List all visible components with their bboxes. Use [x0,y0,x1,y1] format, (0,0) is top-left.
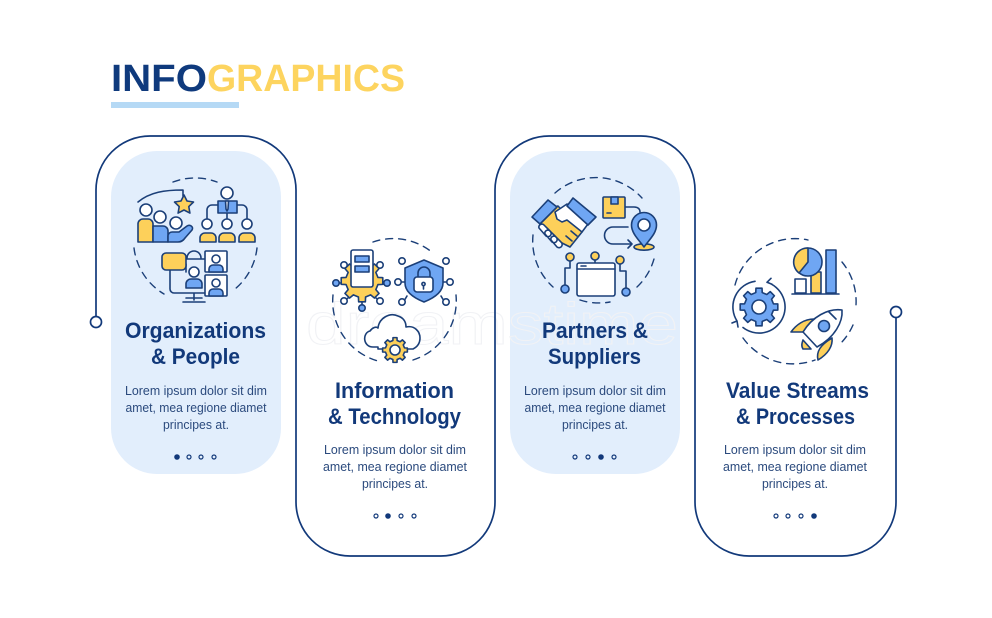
body text [323,443,468,491]
panel background: partners [510,151,680,474]
heading: & Processes [736,404,855,429]
body text [723,443,868,491]
pagination dots [573,455,616,459]
heading [328,378,462,429]
title: GRAPHICS [207,58,405,100]
body text: amet, mea regione diamet [126,401,267,415]
pagination dots [774,514,816,518]
title underline [111,102,239,108]
body text: Lorem ipsum dolor sit dim [324,443,466,457]
panel: value streams and processes [723,239,869,518]
body text: amet, mea regione diamet [524,401,666,415]
heading: Value Streams [726,378,869,403]
heading: Partners & [542,318,648,343]
pagination dots [175,455,216,459]
watermark: dreamstime [306,292,678,357]
heading: & People [151,344,240,369]
heading [726,378,869,429]
body text [524,384,666,432]
icon: information and technology [333,239,456,362]
heading: Organizations [125,318,266,343]
panel: information and technology [323,239,468,518]
heading: Information [335,378,454,403]
body text [125,384,267,432]
icon: partners and suppliers [532,178,656,303]
title: INFO [111,58,207,100]
body text: principes at. [163,418,229,432]
body text: principes at. [562,418,628,432]
body text: Lorem ipsum dolor sit dim [524,384,666,398]
heading [542,318,648,369]
panel: partners and suppliers [524,178,666,459]
body text: amet, mea regione diamet [323,460,468,474]
body text: amet, mea regione diamet [723,460,868,474]
body text: Lorem ipsum dolor sit dim [724,443,866,457]
icon: value streams and processes [732,239,856,364]
panel background: organizations [111,151,281,474]
body text: principes at. [362,477,428,491]
heading: & Technology [328,404,462,429]
body text: principes at. [762,477,828,491]
title [111,58,405,100]
panel: organizations and people [125,178,267,459]
pagination dots [374,514,416,518]
body text: Lorem ipsum dolor sit dim [125,384,267,398]
icon: organizations and people [134,178,257,302]
heading [125,318,266,369]
connecting outline [90,136,902,556]
heading: Suppliers [548,344,641,369]
